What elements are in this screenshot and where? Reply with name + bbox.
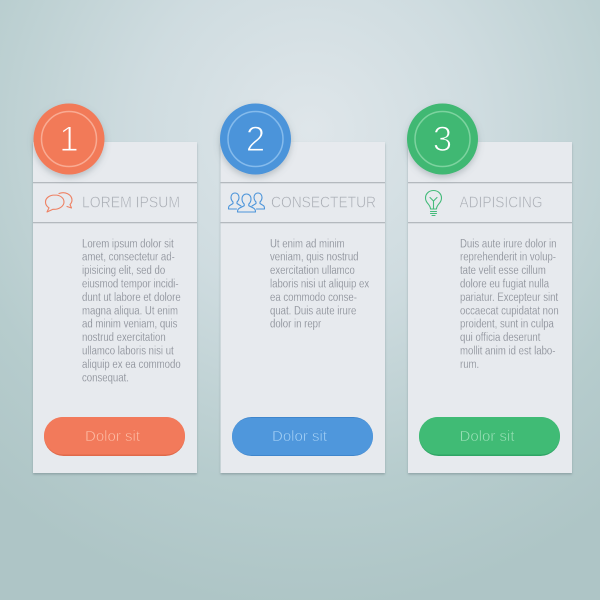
card 2 number badge (220, 104, 291, 174)
card 3 body text: reprehenderit in volup- (460, 251, 556, 264)
card 3 number badge (407, 104, 478, 174)
card 1 body text (82, 237, 181, 385)
card 1 body text: nostrud exercitation (82, 331, 166, 344)
card 3 body text (460, 237, 559, 371)
card 1 body text: eiusmod tempor incidi- (82, 278, 179, 291)
card 1 button: Dolor sit (85, 428, 141, 445)
card 1 body text: ipisicing elit, sed do (82, 264, 165, 277)
card 3 body text: tate velit esse cillum (460, 264, 546, 277)
card 3 body text: rum. (460, 358, 479, 371)
card 3 body text: Duis aute irure dolor in (460, 237, 557, 251)
card 1 body text: amet, consectetur ad- (82, 251, 175, 264)
card 2 button: Dolor sit (272, 428, 328, 445)
card 1 body text: Lorem ipsum dolor sit (82, 237, 174, 251)
card 1 body text: ullamco laboris nisi ut (82, 345, 174, 358)
card 3 number badge: 3 (433, 120, 452, 159)
card 3 body text: proident, sunt in culpa (460, 318, 555, 331)
panel: card 1 (33, 104, 197, 473)
card 2 body text: ea commodo conse- (270, 291, 357, 304)
card 3 button: Dolor sit (459, 428, 515, 445)
panel: card 3 (407, 104, 572, 473)
card 2 body text: veniam, quis nostrud (270, 251, 359, 264)
card 3 heading: ADIPISICING (460, 194, 542, 212)
card 2 body text: quat. Duis aute irure (270, 304, 356, 318)
card 2 button (232, 417, 373, 456)
card 1 body text: aliquip ex ea commodo (82, 358, 181, 371)
card 2 number badge: 2 (246, 120, 265, 159)
card 1 body text: dunt ut labore et dolore (82, 291, 181, 304)
card 2 body text: dolor in repr (270, 318, 322, 331)
card 2 body text (270, 237, 370, 331)
card 3 button (419, 417, 560, 456)
card 3 body text: dolore eu fugiat nulla (460, 278, 550, 291)
card 3 body text: occaecat cupidatat non (460, 304, 559, 318)
icon: group of people (228, 193, 264, 212)
card 3 body text: qui officia deserunt (460, 331, 540, 344)
card 1 number badge: 1 (59, 120, 79, 159)
card 2 body text: laboris nisi ut aliquip ex (270, 278, 370, 291)
card 2 sheet (220, 142, 385, 473)
card 3 body text: pariatur. Excepteur sint (460, 291, 558, 304)
card 1 sheet (33, 142, 197, 473)
card 1 body text: consequat. (82, 371, 129, 385)
card 3 body text: mollit anim id est labo- (460, 345, 556, 358)
card 2 heading: CONSECTETUR (271, 194, 376, 212)
card 1 button (44, 417, 185, 456)
card 1 body text: magna aliqua. Ut enim (82, 304, 178, 318)
panel: card 2 (220, 104, 385, 473)
card 1 body text: ad minim veniam, quis (82, 318, 178, 331)
card 3 sheet (408, 142, 572, 473)
icon: light bulb (426, 190, 442, 216)
icon: speech bubbles (46, 193, 72, 212)
card 2 body text: exercitation ullamco (270, 264, 355, 277)
card 2 body text: Ut enim ad minim (270, 237, 345, 251)
card 1 number badge (34, 104, 104, 174)
card 1 heading: LOREM IPSUM (82, 194, 180, 212)
